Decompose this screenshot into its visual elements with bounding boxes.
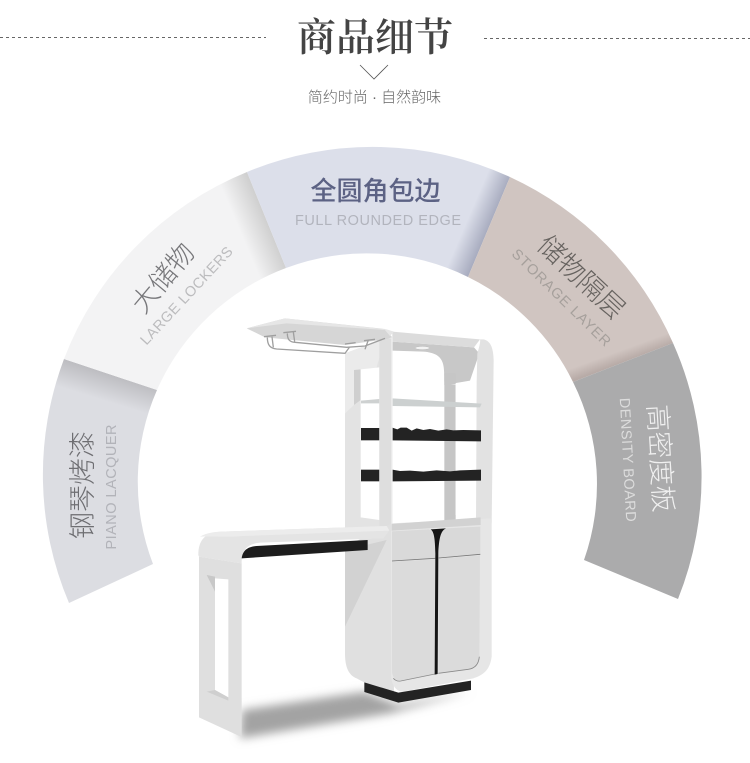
segment: piano lacquer [43,359,157,603]
label cn: large lockers: 大储物 [126,238,201,319]
segment: large lockers [64,172,286,390]
label cn: density board: 高密度板 [642,404,678,513]
black under strip [242,540,368,558]
label en: density board: DENSITY BOARD [616,397,638,522]
left opening [361,367,379,520]
door centre gap [431,528,446,675]
glass shelf [392,398,482,407]
cabinet and table [198,517,492,737]
title: 商品细节 [297,17,453,60]
central post [379,338,392,535]
plinth [364,681,471,703]
wine glass rail [264,331,385,353]
right opening [392,342,477,523]
cabinet front frame [391,518,492,692]
drawer seam [392,554,480,561]
black wine rack lower [392,470,481,481]
label cn: piano lacquer: 钢琴烤漆 [68,431,98,539]
drawers [392,529,435,561]
label cn: storage layer: 储物隔层 [531,230,631,325]
icon: chevron [360,65,388,79]
doors [392,559,435,681]
top band [392,332,480,347]
underside of top band [392,342,479,385]
door bottom line [393,657,479,681]
leg opening [215,578,228,697]
subtitle: 简约时尚 · 自然韵味 [308,89,441,106]
left panel [345,338,392,533]
cabinet ledge [392,517,481,531]
label en: piano lacquer: PIANO LACQUER [104,424,120,550]
panel: arc segments [43,147,702,603]
tower upper [247,318,494,535]
floor shadow [240,692,472,738]
label en: large lockers: LARGE LOCKERS [138,244,237,349]
label cn: full rounded edge: 全圆角包边 [310,176,441,206]
right back column [444,373,456,522]
segment: storage layer [468,177,673,382]
table top [198,526,389,563]
right outer panel [476,339,494,523]
cabinet side [345,523,394,692]
segment: full rounded edge [247,147,510,277]
header: dashed rules [0,38,750,39]
table leg [199,557,242,737]
label en: storage layer: STORAGE LAYER [508,246,613,350]
furniture illustration [198,318,494,738]
segment: density board [573,343,702,599]
canopy [247,318,392,345]
downlight [415,346,430,350]
label en: full rounded edge: FULL ROUNDED EDGE [295,213,461,229]
black wine rack upper [392,428,481,441]
